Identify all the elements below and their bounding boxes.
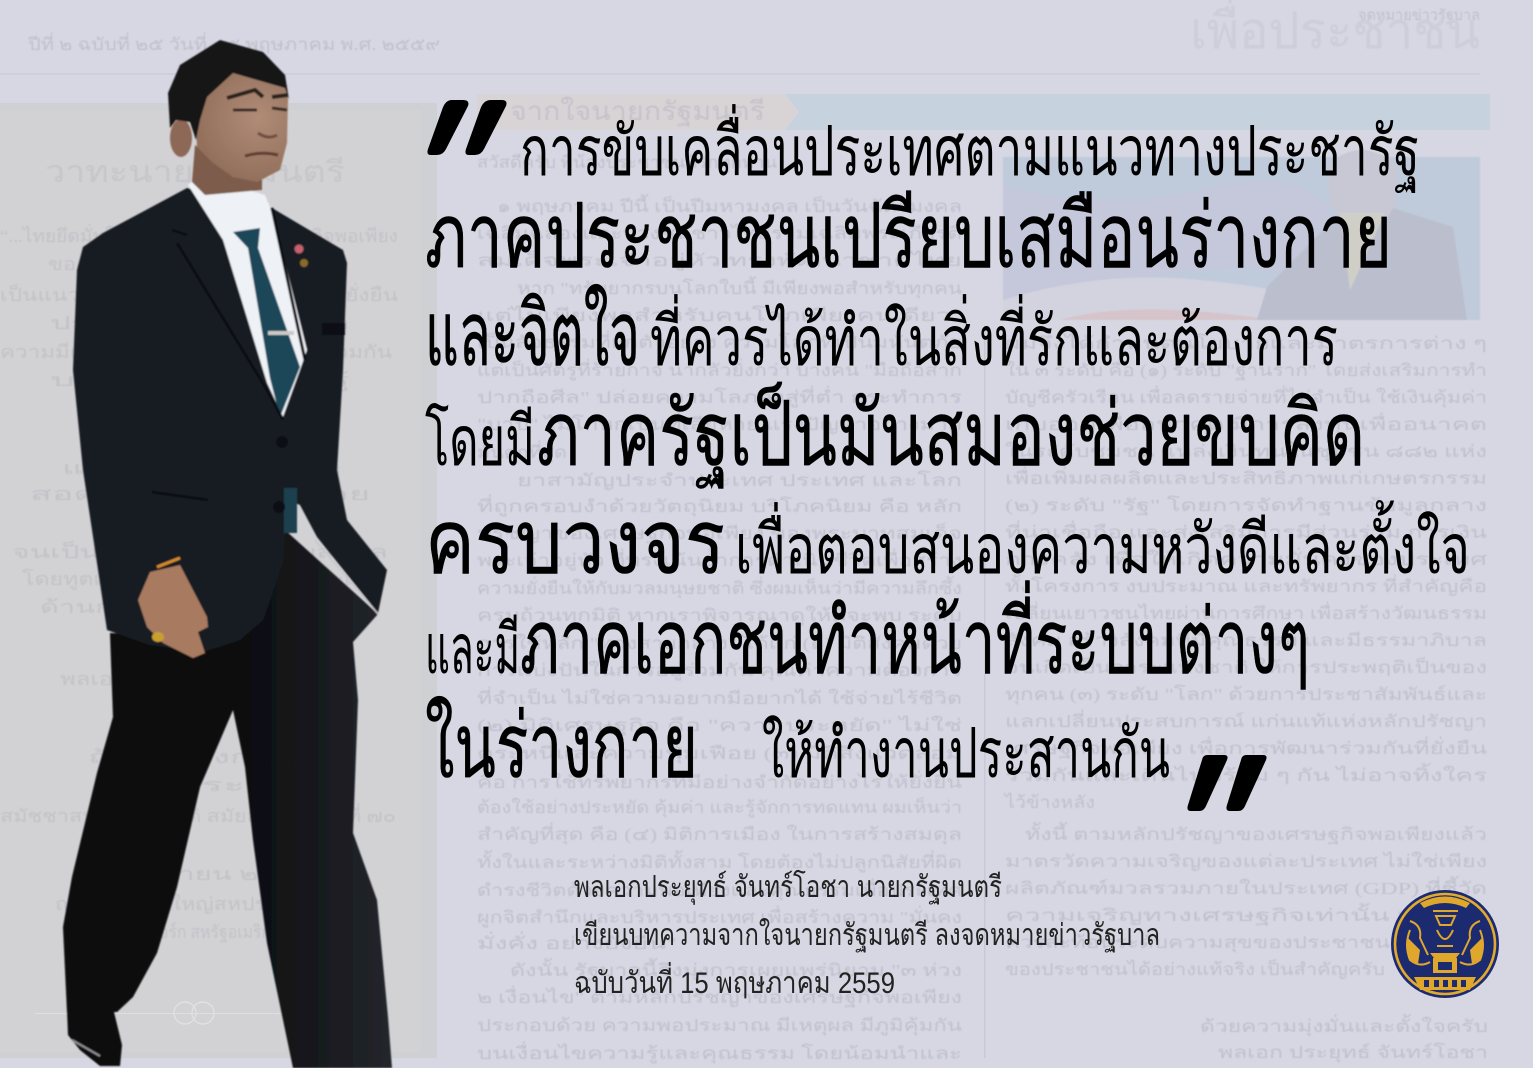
newspaper body text column 2: เก็บออมเพื่ออนาคต มีการลงทุนเพื่ออนาคต bbox=[1005, 412, 1487, 435]
left panel: PM statement: บนเงื่อนไขความรู้ bbox=[50, 367, 351, 391]
newspaper body text column 2: ทั้งโครงการ งบประมาณ และทรัพยากร ที่สำคัญคือ bbox=[1005, 574, 1487, 596]
newspaper body text column 1: ที่ถูกครอบงำด้วยวัตถุนิยม บริโภคนิยม คือ หลัก bbox=[477, 494, 962, 517]
jacket piping bbox=[315, 540, 378, 614]
author attribution bbox=[574, 869, 1160, 1000]
quote text bbox=[425, 104, 1470, 797]
left panel: PM statement: ของพระบาทสมเด็จพระเจ้าอยู่หัว bbox=[48, 252, 348, 275]
left panel: PM statement bbox=[0, 103, 437, 1058]
left panel: PM statement: ถ้อยแถลงการณ์ bbox=[88, 747, 320, 767]
newspaper body text column 1: ๑ พฤษภาคม ปีนี้ เป็นปีมหามงคล เป็นวันฉัตรมงคล bbox=[497, 194, 962, 216]
newspaper body text column 2: ผลิตภัณฑ์มวลรวมภายในประเทศ (GDP) ที่ชี้วัด bbox=[1005, 876, 1487, 898]
newspaper body text column 1: ทั้งในและระหว่างมิติทั้งสาม โดยต้องไม่ปลูกนิสัยที่ผิด bbox=[477, 850, 962, 873]
newspaper body text column 2: ที่น่าเชื่อถือ และส่งเสริมการมีส่วนร่วม การเงิน bbox=[1005, 520, 1488, 542]
hair bbox=[168, 40, 289, 140]
newspaper body text column 2: ทุกคน (๓) ระดับ "โลก" ด้วยการประชาสัมพันธ์และ bbox=[1005, 684, 1487, 705]
newspaper body text column 1: ดำรงชีวิตด้วยความพอเพียงและคุณธรรมเพื่อประเทศ bbox=[477, 878, 962, 901]
newspaper body text column 2: ไว้ข้างหลัง bbox=[1003, 792, 1095, 812]
newspaper body text column 1: (๒) มิติเศรษฐกิจ คือ "ความประหยัด" ไม่ใช่ bbox=[477, 715, 962, 736]
newspaper body text column 1: คือ การใช้ทรัพยากรที่มีอย่างจำกัดอย่างไรให้ยั่งยืน bbox=[477, 770, 963, 792]
newspaper masthead left: ปีที่ ๒ ฉบับที่ ๒๕ วันที่ ๑๕ พฤษภาคม พ.ศ. ๒๕๕๙ bbox=[27, 32, 440, 54]
panel: prime minister's column heading band bbox=[477, 94, 1490, 130]
quote line 7: ให้ทำงานประสานกัน bbox=[762, 714, 1170, 792]
quote line 6: และมี bbox=[425, 611, 520, 688]
right trouser leg bbox=[150, 530, 392, 1068]
newspaper body text column 1: สำคัญที่สุด คือ (๔) มิติการเมือง ในการสร้างสมดุล bbox=[477, 822, 962, 845]
shirt bbox=[188, 175, 307, 417]
newspaper body text column 2: แลกเปลี่ยนประสบการณ์ แก่นแท้แห่งหลักปรัชญา bbox=[1005, 709, 1487, 731]
newspaper masthead right: จดหมายข่าวรัฐบาล bbox=[1358, 7, 1480, 24]
newspaper body text column 2: ร่วมกันและเดินไปพร้อม ๆ กัน ไม่อาจทิ้งใคร bbox=[1005, 763, 1487, 785]
source note: เขียนบทความจากใจนายกรัฐมนตรี ลงจดหมายข่าวรัฐบาล bbox=[574, 918, 1160, 953]
jacket buttons bbox=[273, 436, 288, 513]
author name: พลเอกประยุทธ์ จันทร์โอชา นายกรัฐมนตรี bbox=[574, 869, 1002, 906]
ring bbox=[152, 632, 164, 642]
newspaper body text column 2: ทั้งนี้ ตามหลักปรัชญาของเศรษฐกิจพอเพียงแล้ว bbox=[1025, 822, 1487, 845]
newspaper body text column 1: การใช้หลัก "ทางสายกลาง" ได้แก่ (๑) มิติสังคมด้วย bbox=[477, 633, 962, 653]
panel: prime minister's column heading band: จากใจนายกรัฐมนตรี bbox=[510, 97, 765, 127]
left panel: PM statement: แนวทางการพัฒนา bbox=[62, 458, 342, 478]
newspaper body text column 1: ความยั่งยืนให้กับมวลมนุษยชาติ ซึ่งผมเห็นว่ามีความลึกซึ้ง bbox=[477, 576, 962, 599]
left panel: PM statement: ณ สำนักงานใหญ่สหประชาชาติ bbox=[55, 893, 345, 914]
newspaper body text column 1: เป็นสัจธรรมที่ยกตัวอย่าง ความโลภที่เป็นมหันตภัย bbox=[477, 330, 962, 352]
quote line 3 bbox=[425, 285, 1338, 385]
newspaper body text column 2 bbox=[1003, 333, 1488, 1063]
neck bbox=[192, 145, 262, 195]
left panel: PM statement: ประเทศไทยเชื่อมั่นว่า bbox=[50, 310, 350, 333]
newspaper body text column 2: มาตรวัดความเจริญของแต่ละประเทศ ไม่ใช่เพียง bbox=[1005, 851, 1487, 871]
newspaper body text column 2: พลเอก ประยุทธ์ จันทร์โอชา bbox=[1218, 1042, 1488, 1063]
newspaper body text column 1: มั่งคั่ง อย่างยั่งยืน" bbox=[477, 931, 677, 953]
tie bbox=[233, 228, 300, 417]
newspaper body text column 1: แต่เป็นศัตรูที่ร้ายกาจ น่ากลัวยิ่งกว่า บางคน "มือถือสาก bbox=[477, 358, 962, 381]
eyebrows bbox=[227, 90, 288, 98]
newspaper body text column 2: เพื่อเพิ่มผลผลิตและประสิทธิภาพแก่เกษตรกรรม bbox=[1005, 466, 1487, 488]
quote line 5 bbox=[425, 493, 1470, 593]
left panel: PM statement: วาทะนายกรัฐมนตรี bbox=[45, 156, 345, 190]
tie lower end bbox=[284, 488, 297, 533]
newspaper body text column 1: เฉลิมฉลองและปวงชนชาวไทยร่วมเฉลิมพระเกียรติ bbox=[477, 223, 962, 243]
left panel: PM statement: ความมีเหตุผลและภูมิคุ้มกันจะเกิดร่วมกัน bbox=[0, 342, 392, 363]
nose bbox=[258, 133, 277, 137]
newspaper body text column 2: ของประชาชนได้อย่างแท้จริง เป็นสำคัญครับ bbox=[1005, 958, 1385, 979]
newspaper body text column 1: แต่ไม่เพียงพอสำหรับคนโลภเพียงคนเดียว" bbox=[477, 305, 962, 325]
quote line 4 bbox=[425, 380, 1365, 489]
newspaper body text column 1: ๒ เงื่อนไข" ตามหลักปรัชญาของเศรษฐกิจพอเพียง bbox=[477, 985, 962, 1008]
hand bbox=[138, 565, 208, 658]
newspaper body text column 2: การคลัง เพื่อให้เกิดความมั่นคงของประเทศ bbox=[1005, 547, 1487, 569]
newspaper body text column 1: ต้องใช้อย่างประหยัด คุ้มค่า และรู้จักการทดแทน ผมเห็นว่า bbox=[477, 796, 962, 818]
left panel: PM statement: เป็นแนวทางการพัฒนาประเทศอย่างยั่งยืน bbox=[0, 282, 398, 305]
quote line 3: และจิตใจ bbox=[425, 285, 640, 385]
wrist band bbox=[157, 558, 180, 567]
newspaper body text column 1: "บาป" ไม่โกหกเป็นที่เสียหาย แรงปัญหาอย่างมาก bbox=[477, 412, 962, 434]
newspaper body text column 1: มันตกที่สุด bbox=[477, 440, 567, 463]
tie clip bbox=[268, 331, 294, 335]
newspaper body text column 1: ปากถือศีล" ปล่อยความโลภลงสู่ที่ต่ำ กระทำการ bbox=[477, 385, 962, 408]
newspaper body text column 1: ตระหนี่และความฟุ่มเฟือย (๓) มิติสิ่งแวดล้อม bbox=[477, 741, 962, 764]
newspaper body text column 2: จนเกิดเป็นวาระแห่งชาติ ให้การประพฤติเป็นของ bbox=[1005, 656, 1487, 677]
newspaper body text column 1: ที่จำเป็น ไม่ใช่ความอยากมีอยากได้ ใช้จ่ายไร้ชีวิต bbox=[477, 686, 962, 708]
quote line 6 bbox=[425, 580, 1310, 693]
hip pocket welt bbox=[152, 492, 208, 500]
newspaper body text column 2: ผมจึงได้กำหนดนโยบายและมาตรการต่าง ๆ bbox=[1005, 333, 1487, 353]
newspaper body text column 2: สังคม สร้างสังคมที่มีคุณธรรม และมีธรรมาภิบาล bbox=[1005, 628, 1487, 651]
newspaper body text column 2: ควรสะท้อนระดับความสุขของประชาชน bbox=[1005, 933, 1391, 953]
ear bbox=[170, 119, 192, 157]
shoe bbox=[67, 1008, 122, 1066]
newspaper body text column 1: ผูกจิตสำนึกและบริหารประเทศ เพื่อสร้างความ "มั่นคง bbox=[477, 905, 962, 928]
left panel: PM statement: สมัชชาสหประชาชาติ สมัยสามัญ ครั้งที่ ๗๐ bbox=[0, 803, 396, 826]
newspaper body text column 1: การแบ่งปันในการอยู่ร่วมกัน คุณค่าความต้องการ bbox=[477, 660, 962, 681]
left panel: PM statement: นครนิวยอร์ก สหรัฐอเมริกา bbox=[100, 922, 280, 943]
left trouser leg bbox=[63, 633, 240, 1012]
quote line 7 bbox=[425, 697, 1170, 797]
left panel: PM statement: “...ไทยยึดมั่นในหลักปรัชญาของเศรษฐกิจพอเพียง bbox=[0, 223, 398, 247]
shoe highlight bbox=[72, 1040, 100, 1056]
newspaper body text column 1: สวัสดีครับ พี่น้องประชาชนที่รักทุกท่าน bbox=[477, 150, 777, 173]
icon: closing quotation mark bbox=[1187, 755, 1267, 811]
left panel: PM statement: พลเอก ประยุทธ์ จันทร์โอชา bbox=[60, 668, 340, 690]
newspaper body text column 2: เปลี่ยนเยาวชนไทยผ่านการศึกษา เพื่อสร้างวัฒนธรรม bbox=[1005, 601, 1487, 623]
newspaper body text column 2: ด้วยความมุ่งมั่นและตั้งใจครับ bbox=[1200, 1014, 1488, 1037]
newspaper body text column 2: เศรษฐกิจพอเพียง เพื่อการพัฒนาร่วมกันที่ยั่งยืน bbox=[1005, 736, 1488, 759]
newspaper body text column 2: ใน ๓ ระดับ คือ (๑) ระดับ "ฐานราก" โดยส่งเสริมการทำ bbox=[1005, 360, 1487, 381]
left panel: PM statement: ด้านการพัฒนาอย่างยั่งยืน bbox=[40, 594, 360, 617]
left panel: PM statement: ในที่ประชุม bbox=[100, 772, 300, 796]
newspaper masthead right: เพื่อประชาชน bbox=[1190, 0, 1480, 59]
issue date: ฉบับวันที่ 15 พฤษภาคม 2559 bbox=[574, 962, 895, 1000]
icon: opening quotation mark bbox=[427, 100, 506, 155]
newspaper body text column 1: ดังนั้น รัฐบาลนี้จึงมุ่งการเผยแพร่นิยาม "๓ ห่วง bbox=[510, 958, 962, 981]
left panel: PM statement: สอดคล้องกับเป้าหมาย bbox=[30, 484, 370, 504]
newspaper body text column 1: บนเงื่อนไขความรู้และคุณธรรม โดยน้อมนำและ bbox=[477, 1041, 962, 1064]
newspaper body text column 1: สมเด็จพระเจ้าอยู่หัว ทรงพัฒนาชาติไทย bbox=[477, 249, 962, 271]
newspaper body text column 1: ประกอบด้วย ความพอประมาณ มีเหตุผล มีภูมิคุ้มกัน bbox=[477, 1016, 962, 1036]
newspaper body text column 1: ครบถ้วนทุกมิติ หากเราพิจารณาดูให้ดีจะพบ ระดับ bbox=[477, 605, 962, 626]
quote line 7: ในร่างกาย bbox=[425, 697, 698, 797]
quote line 4: โดยมี bbox=[425, 402, 535, 480]
lapel pins bbox=[294, 244, 304, 254]
quote line 5: ครบวงจร bbox=[425, 493, 725, 593]
newspaper body text column 1 bbox=[477, 150, 963, 1064]
icon: government emblem bbox=[1391, 890, 1499, 998]
column photo with flag bbox=[1003, 150, 1480, 320]
newspaper body text column 2: บัญชีครัวเรือน เพื่อลดรายจ่ายที่ไม่จำเป็น ใช้เงินคุ้มค่า bbox=[1005, 385, 1487, 408]
newspaper body text column 1: พระเจ้าอยู่หัว ที่ทรงเน้นย้ำการดำเนินชีวิตเพื่อสร้าง bbox=[477, 548, 962, 571]
newspaper body text column 1: หาก "ทรัพยากรบนโลกใบนี้ มีเพียงพอสำหรับทุกคน bbox=[517, 276, 962, 299]
left panel: PM statement: จนเป็นที่ยอมรับในระดับสากล bbox=[12, 539, 388, 562]
newspaper body text column 2: (๒) ระดับ "รัฐ" โดยการจัดทำฐานข้อมูลกลาง bbox=[1005, 495, 1487, 516]
eyes bbox=[233, 108, 287, 110]
newspaper body text column 2: ความเจริญทางเศรษฐกิจเท่านั้น หากแต่ bbox=[1005, 903, 1487, 926]
newspaper body text column 1: ปรัชญาของเศรษฐกิจพอเพียง ของพระบาทสมเด็จ bbox=[477, 522, 962, 544]
newspaper body text column 2: ในระดับชุมชน แหล่งเงินทุนในชุมชน ๘๘๒ แห่ง bbox=[1005, 441, 1487, 462]
photo: prime minister walking bbox=[63, 40, 392, 1068]
breast pocket bbox=[322, 323, 345, 335]
left panel: PM statement: โดยทูตเศรษฐกิจและการต่างประเทศ bbox=[22, 568, 383, 590]
left panel: PM statement: ๒๗ กันยายน ๒๕๕๘ bbox=[75, 864, 325, 884]
newspaper body text column 1: ยาสามัญประจำประเทศ ประเทศ และโลก bbox=[517, 470, 962, 490]
face bbox=[195, 70, 288, 182]
jacket bbox=[73, 188, 387, 652]
mouth bbox=[245, 153, 278, 156]
lapel lines bbox=[172, 208, 305, 420]
